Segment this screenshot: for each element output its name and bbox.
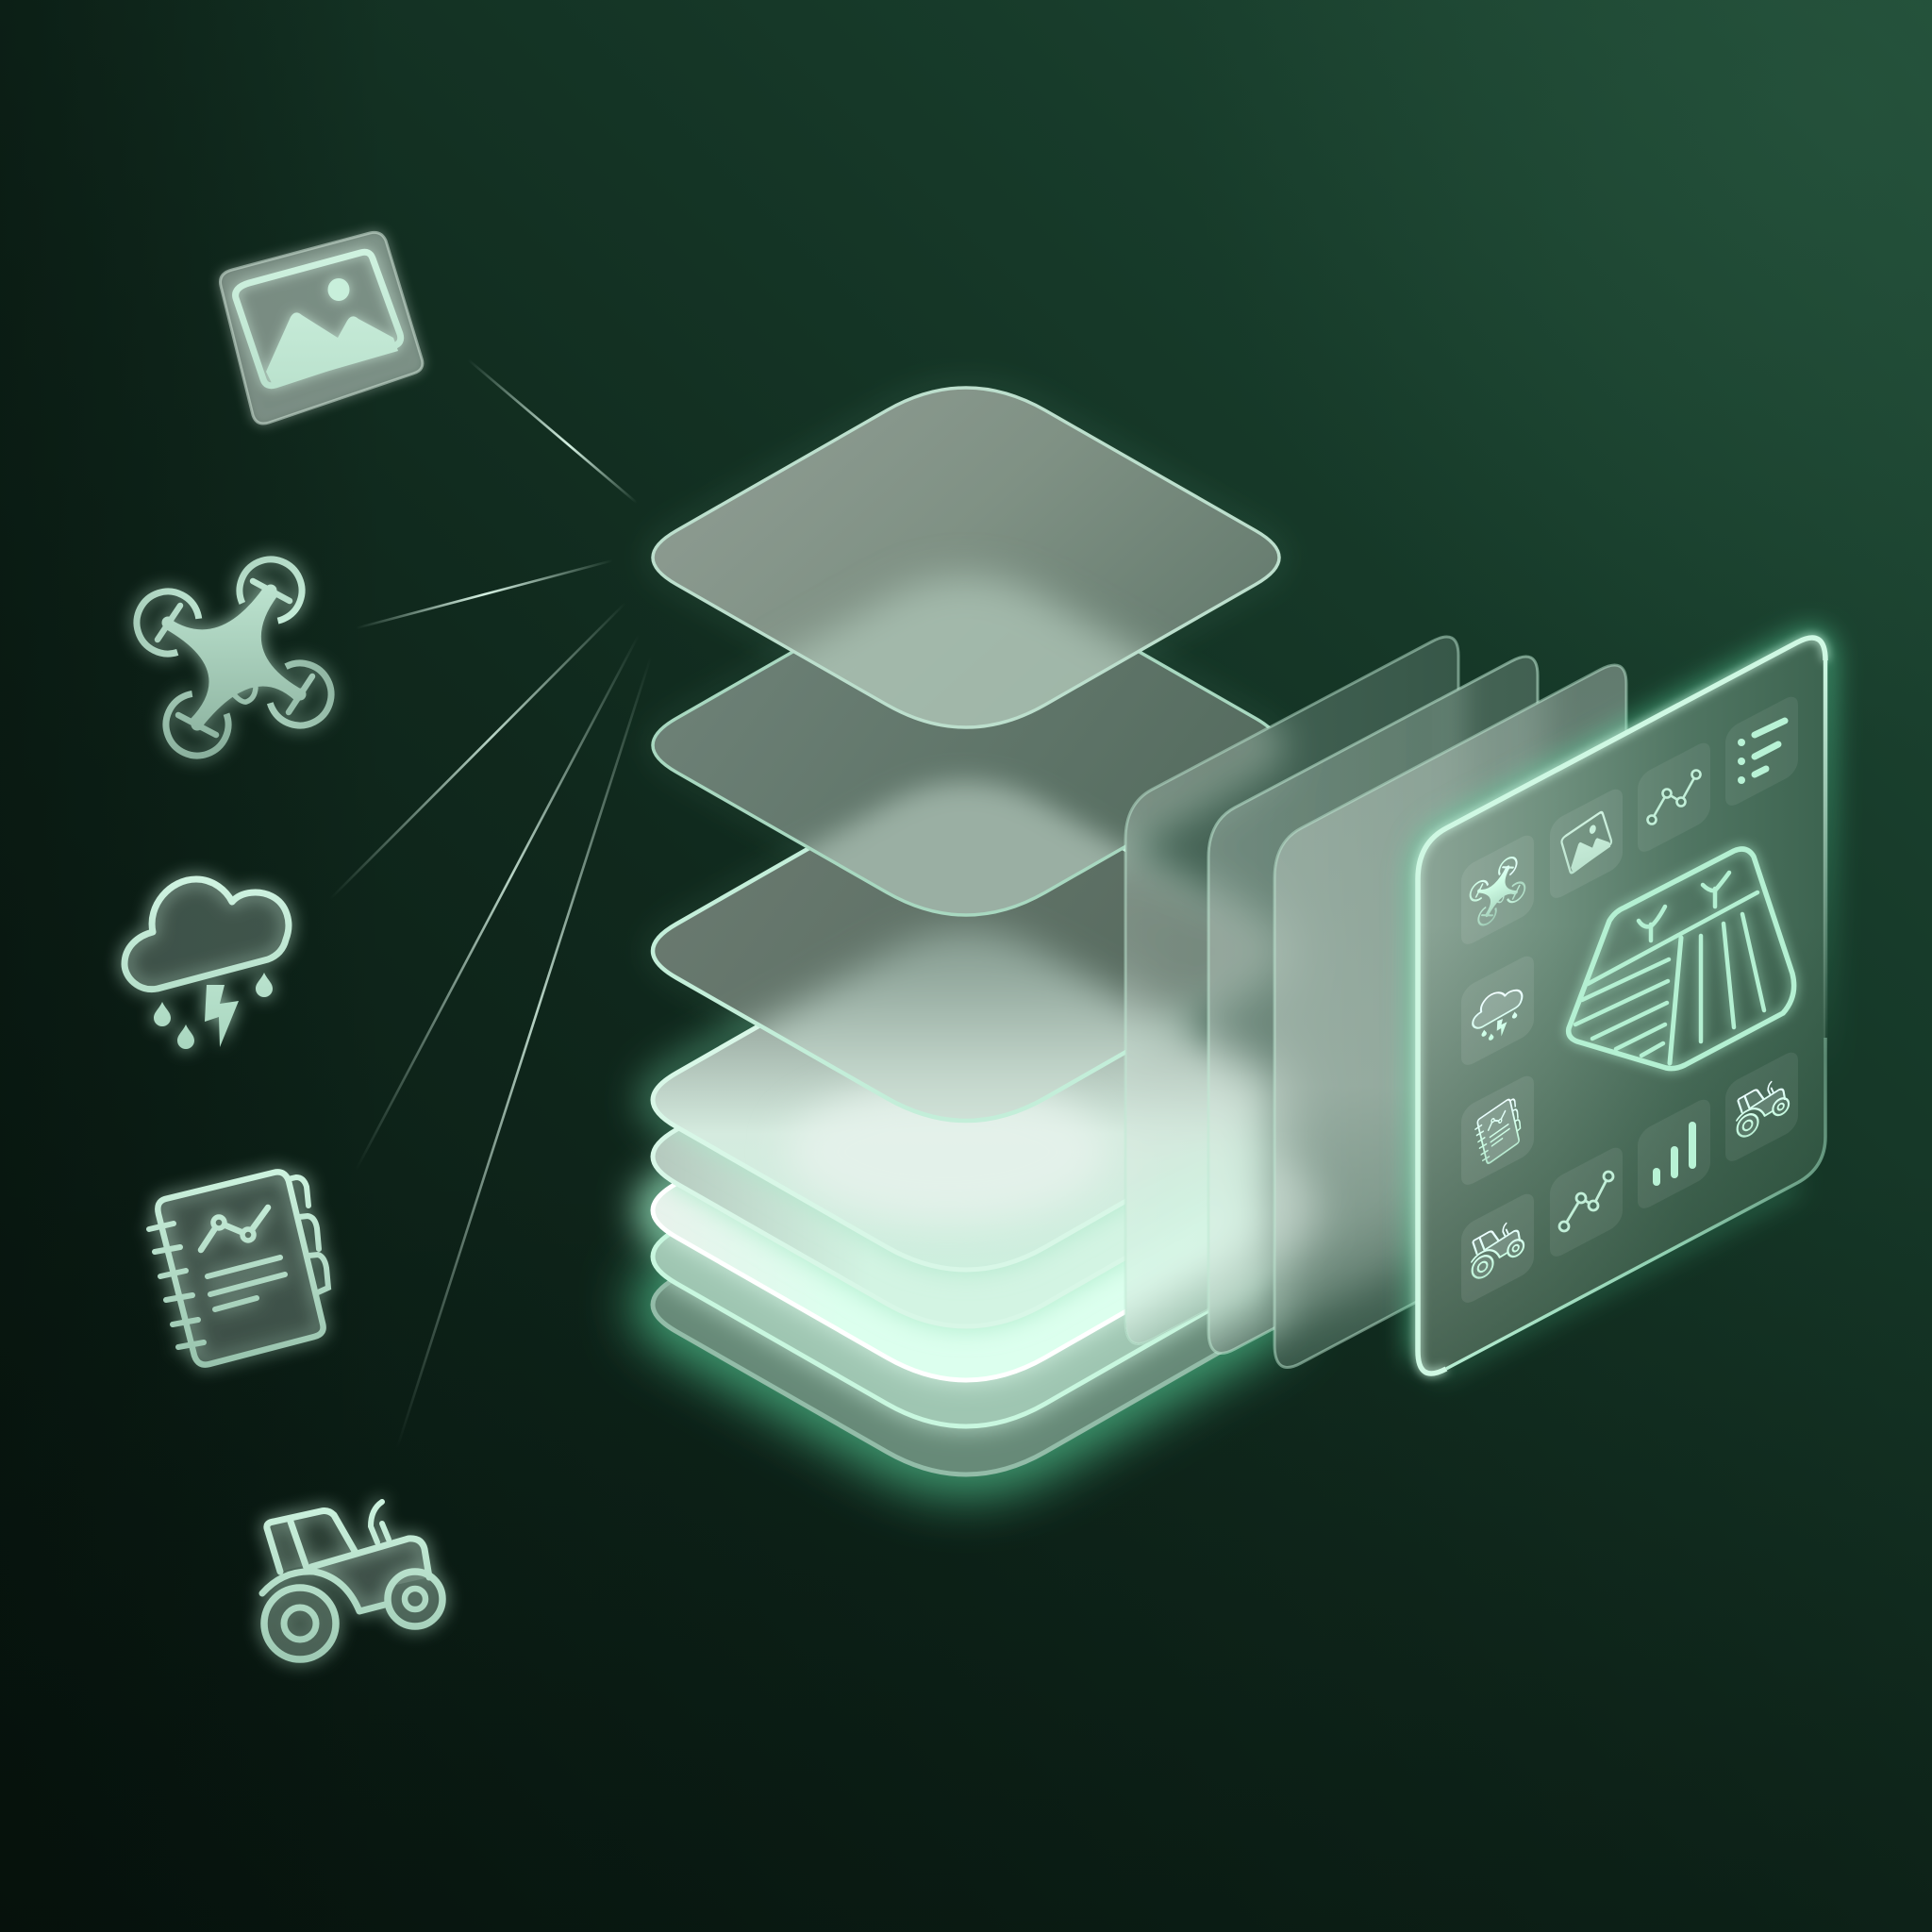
layer 3 (651, 830, 1285, 1123)
back glass panel B (653, 388, 1547, 1474)
panel glow (1418, 638, 1825, 1373)
layer 7 (651, 1217, 1300, 1428)
icon: satellite photo card (221, 232, 423, 424)
tile: photo (1550, 785, 1623, 903)
tile: line chart top (1638, 739, 1710, 857)
icon: storm cloud (125, 879, 289, 1049)
tile: tractor right (1725, 1048, 1798, 1166)
panel body (1418, 637, 1825, 1374)
layer 8 (651, 1271, 1301, 1477)
icon: drone (128, 549, 341, 764)
icon: field notebook (149, 1172, 328, 1365)
glow under the stacked layers (653, 388, 1279, 1474)
front dashboard panel (1418, 637, 1825, 1374)
layer 1 (653, 388, 1279, 915)
panel edges (1446, 1038, 1825, 1369)
tile: bar chart (1638, 1095, 1710, 1213)
tile: notebook (1461, 1072, 1534, 1190)
tile: tractor lower left (1461, 1190, 1534, 1307)
layer 5 (651, 1108, 1301, 1328)
layer 4 (651, 1004, 1300, 1272)
tile: list (1725, 692, 1798, 810)
tile: line chart bottom (1550, 1143, 1623, 1261)
layer 2 (653, 575, 1279, 1121)
connector lines from source icons to the data stack (330, 359, 651, 1448)
icon: tractor (262, 1502, 442, 1659)
layer 6 (651, 1162, 1290, 1383)
back glass panel A (653, 388, 1472, 1474)
tile: drone (1461, 831, 1534, 949)
icon: crop field (1569, 849, 1794, 1069)
tile: storm cloud (1461, 952, 1534, 1070)
stack of data layers (653, 388, 1279, 1474)
back glass panel C (653, 388, 1641, 1474)
